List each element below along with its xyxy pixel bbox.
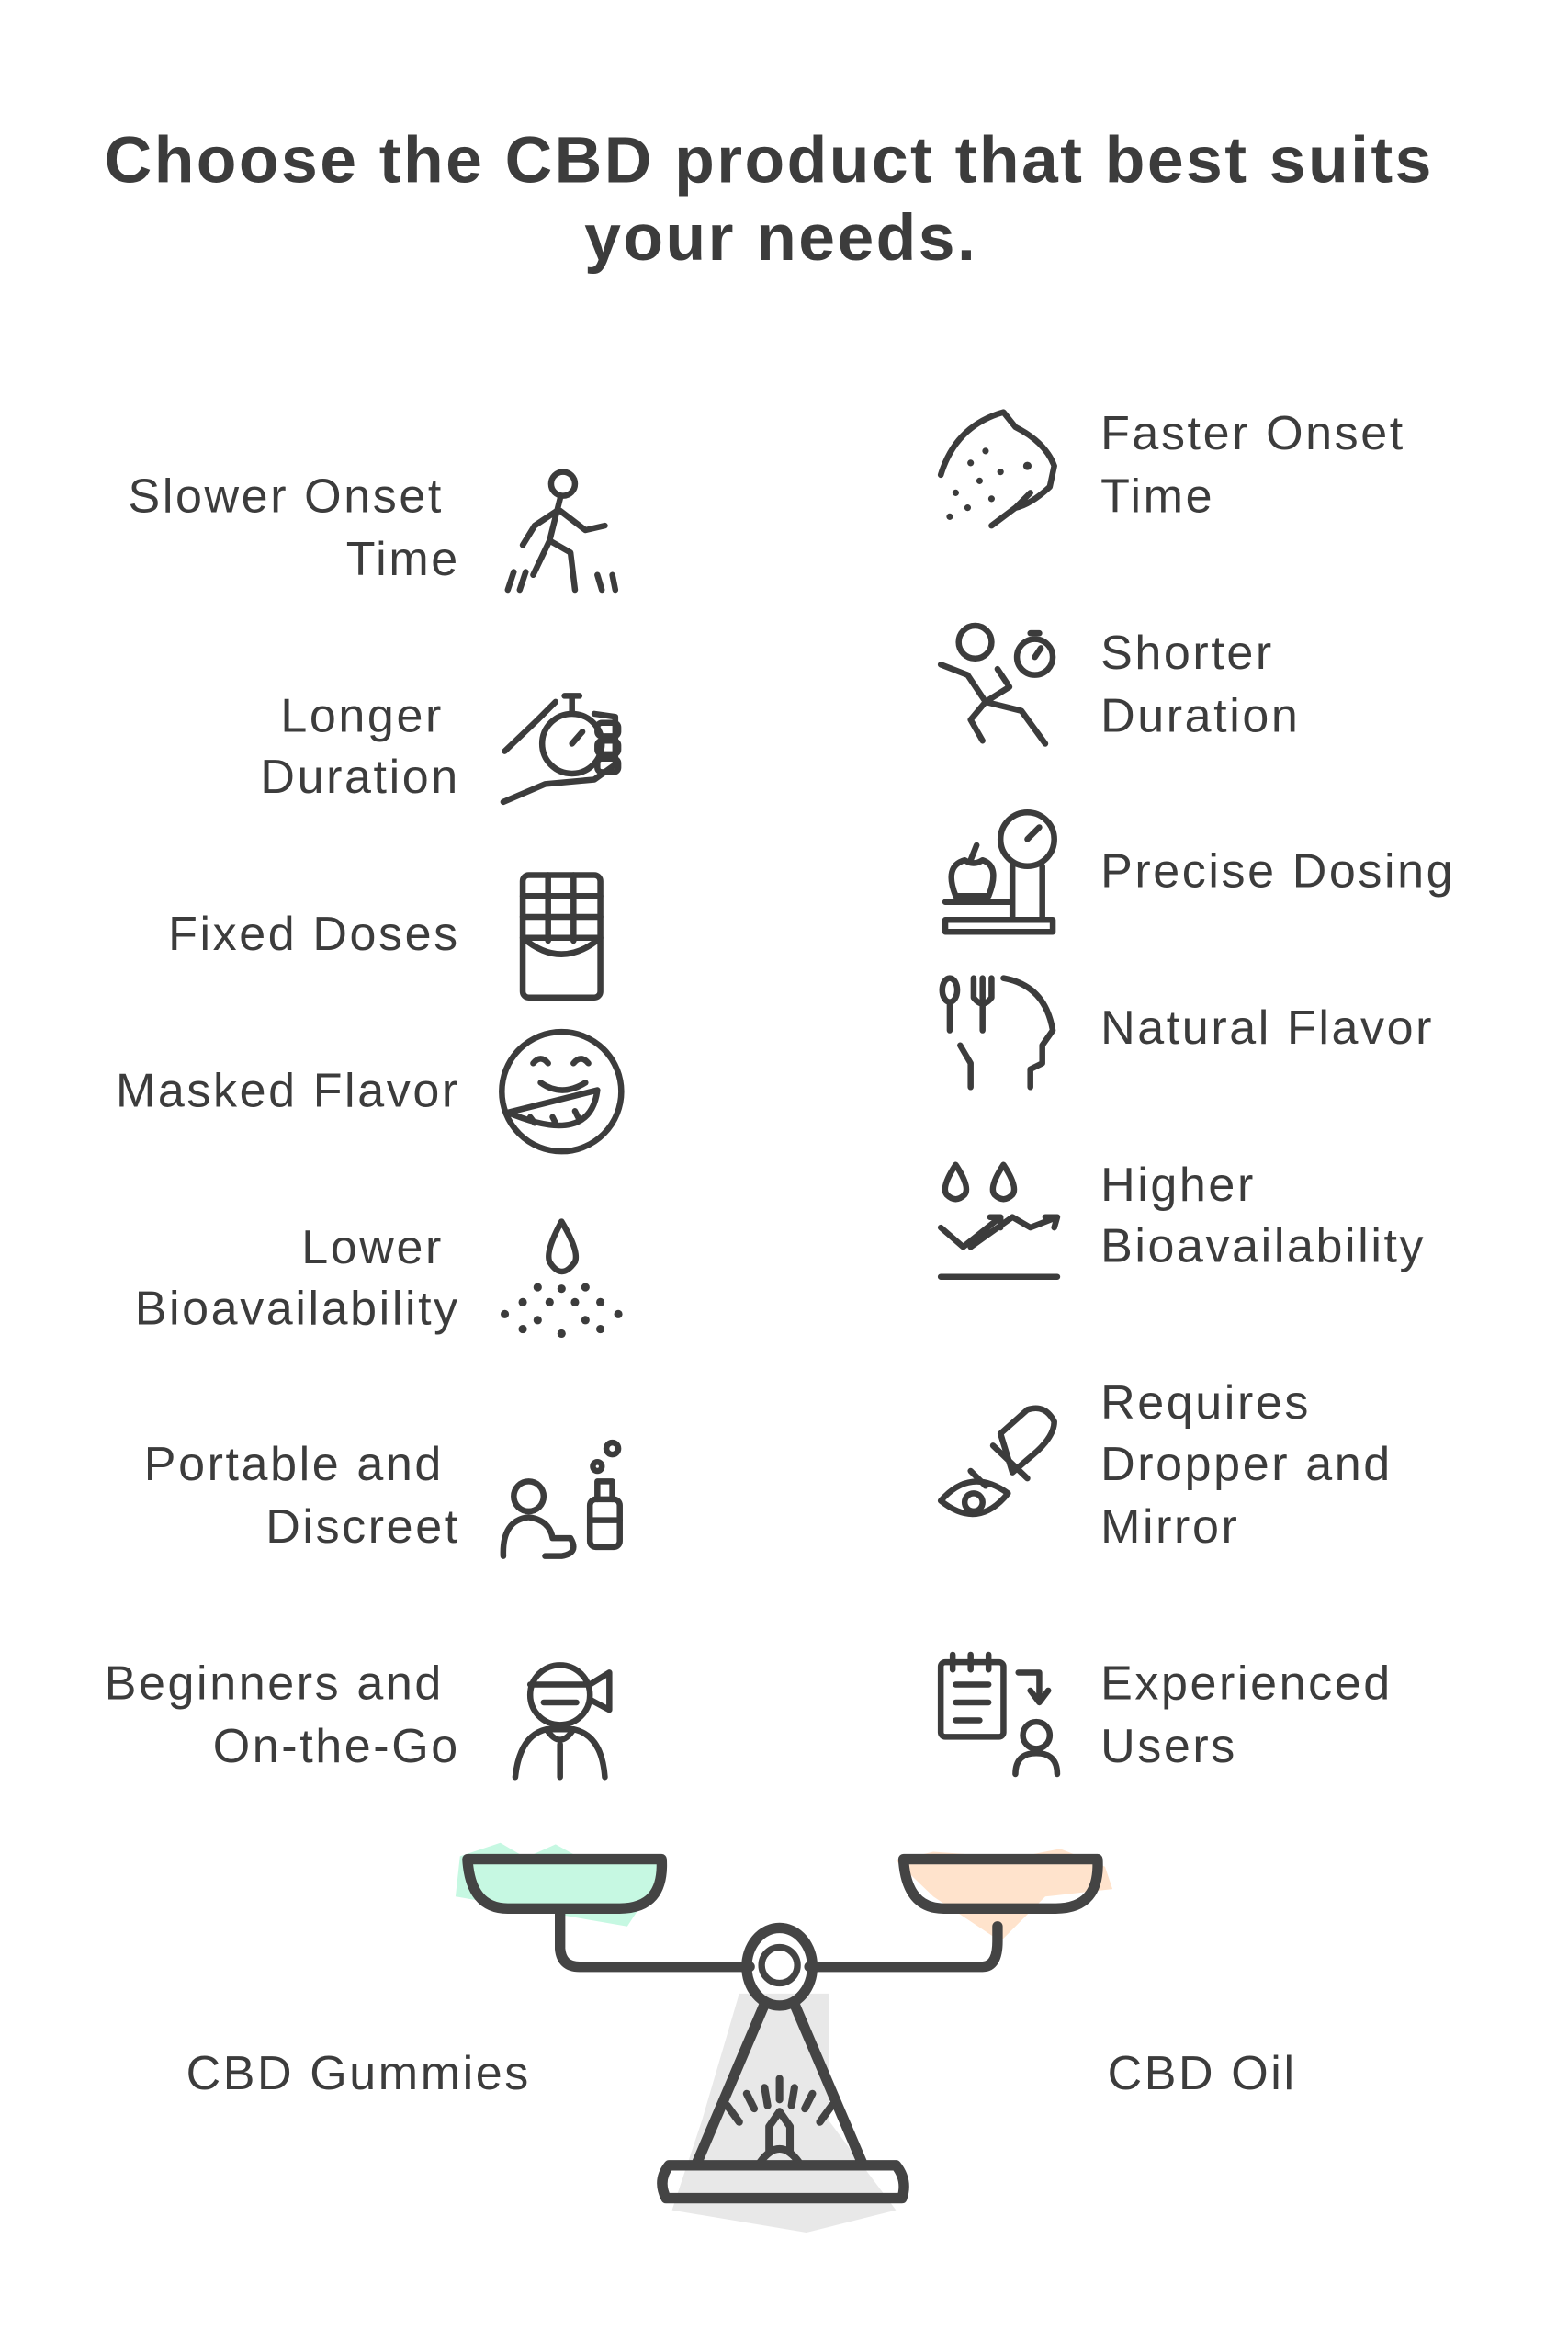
label: Requires Dropper and Mirror: Mirror xyxy=(1100,1500,1239,1554)
base shadow xyxy=(672,1994,896,2233)
label: Slower Onset Time: Time xyxy=(346,533,460,586)
label: Longer Duration: Longer xyxy=(280,689,444,742)
label: Longer Duration: Duration xyxy=(260,751,460,804)
label: Experienced Users: Users xyxy=(1100,1720,1237,1773)
label: CBD Gummies: CBD Gummies xyxy=(186,2047,531,2100)
label: Experienced Users: Experienced xyxy=(1100,1657,1393,1711)
icon: clipboard and user xyxy=(941,1655,1057,1774)
label: Fixed Doses: Fixed Doses xyxy=(168,908,460,961)
title: your needs. xyxy=(584,201,977,275)
label: Beginners and On-the-Go: On-the-Go xyxy=(213,1720,460,1773)
label: Precise Dosing: Precise Dosing xyxy=(1100,844,1455,898)
icon: chocolate bar xyxy=(523,875,601,998)
icon: person with bandana xyxy=(515,1665,609,1777)
label: Higher Bioavailability: Higher xyxy=(1100,1159,1256,1212)
label: Faster Onset Time: Time xyxy=(1100,470,1214,524)
label: Portable and Discreet: Portable and xyxy=(144,1438,444,1491)
label: Faster Onset Time: Faster Onset xyxy=(1100,407,1405,460)
icon: smiling face with watermelon xyxy=(502,1032,621,1151)
right pan highlight (orange) xyxy=(896,1849,1112,1941)
icon: head profile with spoon and fork xyxy=(942,978,1053,1087)
icon: runner with stopwatch xyxy=(941,626,1053,743)
icon: dropper and eye xyxy=(941,1408,1055,1514)
label: Higher Bioavailability: Bioavailability xyxy=(1100,1219,1426,1272)
label: Requires Dropper and Mirror: Requires xyxy=(1100,1376,1311,1430)
icon: person with bottle xyxy=(503,1442,620,1556)
label: CBD Oil: CBD Oil xyxy=(1108,2047,1297,2100)
label: Beginners and On-the-Go: Beginners and xyxy=(105,1657,444,1711)
label: Shorter Duration: Shorter xyxy=(1100,627,1274,680)
icon: cheetah head xyxy=(941,413,1055,526)
label: Portable and Discreet: Discreet xyxy=(265,1500,460,1554)
left column: CBD Gummies features xyxy=(105,470,623,1777)
label: Natural Flavor: Natural Flavor xyxy=(1100,1001,1434,1055)
right column: CBD Oil features xyxy=(941,407,1455,1774)
label: Shorter Duration: Duration xyxy=(1100,689,1300,742)
label: Lower Bioavailability: Bioavailability xyxy=(135,1283,460,1336)
icon: drop with dots xyxy=(501,1222,623,1338)
label: Masked Flavor: Masked Flavor xyxy=(116,1064,460,1117)
label: Requires Dropper and Mirror: Dropper and xyxy=(1100,1438,1393,1491)
label: Slower Onset Time: Slower Onset xyxy=(129,470,444,524)
left pan highlight (green) xyxy=(456,1843,664,1927)
title xyxy=(105,123,1434,275)
title: Choose the CBD product that best suits xyxy=(105,123,1434,197)
icon: walking person xyxy=(508,472,615,590)
balance scale xyxy=(456,1843,1112,2233)
icon: drops and upward arrows xyxy=(941,1165,1057,1277)
icon: scale with apple xyxy=(945,812,1055,932)
icon: pointer with ticks xyxy=(728,2079,832,2163)
label: Lower Bioavailability: Lower xyxy=(301,1221,444,1274)
icon: hand with stopwatch xyxy=(503,695,618,802)
